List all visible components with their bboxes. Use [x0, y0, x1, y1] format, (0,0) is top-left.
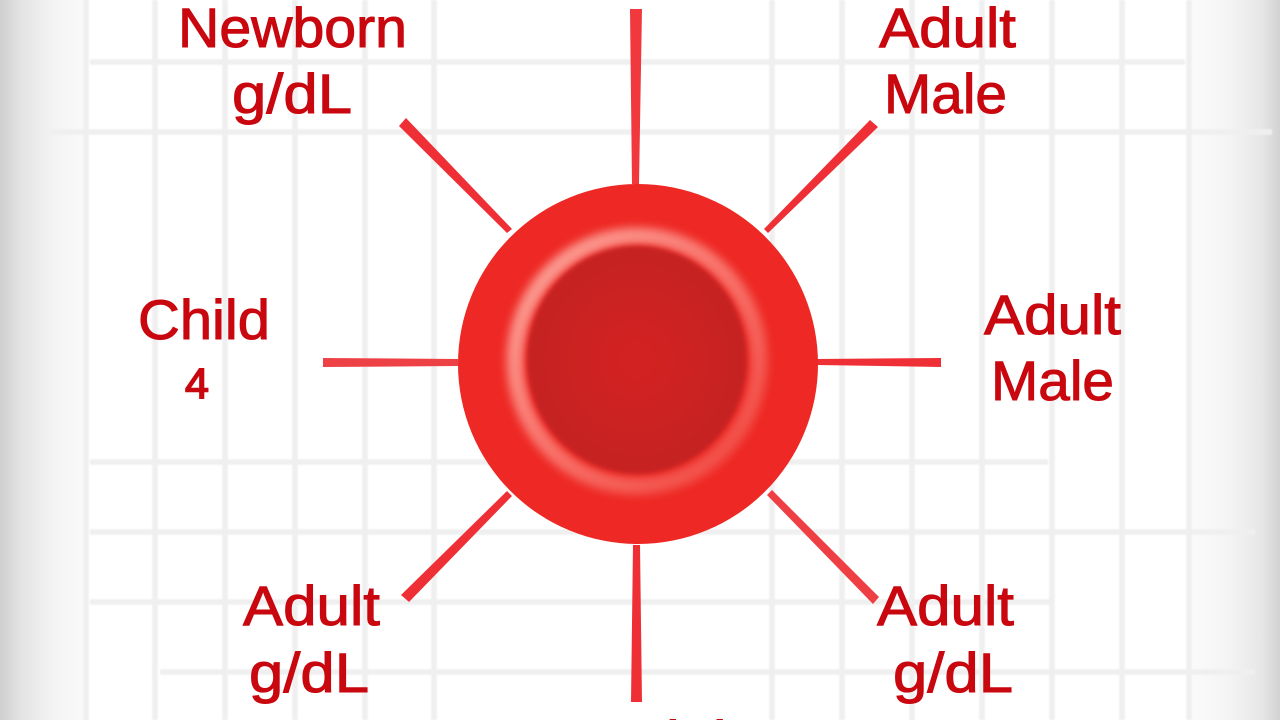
label: child [138, 288, 270, 408]
spoke: lower right [767, 490, 879, 604]
spoke: upper right [764, 120, 878, 233]
label: adult lower left: g/dL [249, 641, 369, 704]
spoke: bottom [631, 545, 642, 702]
label: adult lower right: Adult [877, 574, 1014, 637]
label: adult male right: Adult [984, 283, 1121, 346]
label: adult lower right: g/dL [893, 641, 1013, 704]
left edge shade [0, 0, 88, 720]
spokes [323, 9, 941, 702]
label: newborn: g/dL [232, 62, 352, 125]
spoke: left [323, 358, 458, 367]
label: adult lower left: Adult [243, 574, 380, 637]
spoke: right [817, 358, 941, 367]
label: child: 4 [185, 360, 209, 408]
red blood cell [458, 184, 818, 544]
label: child: Child [138, 288, 270, 351]
label: adult lower right [877, 574, 1014, 704]
spoke: lower left [401, 491, 512, 602]
highlight ring [515, 236, 759, 486]
cell body [458, 184, 818, 544]
label: adult male right [984, 283, 1121, 412]
label: adult male right: Male [991, 349, 1114, 412]
label: adult male top: Male [884, 62, 1007, 125]
cell centre [527, 246, 747, 474]
label: newborn [178, 0, 407, 125]
label: adult lower left [243, 574, 380, 704]
right edge shade [1190, 0, 1280, 720]
label: adult male top [879, 0, 1016, 125]
spoke: upper left [399, 118, 512, 233]
spoke: top [630, 9, 642, 184]
